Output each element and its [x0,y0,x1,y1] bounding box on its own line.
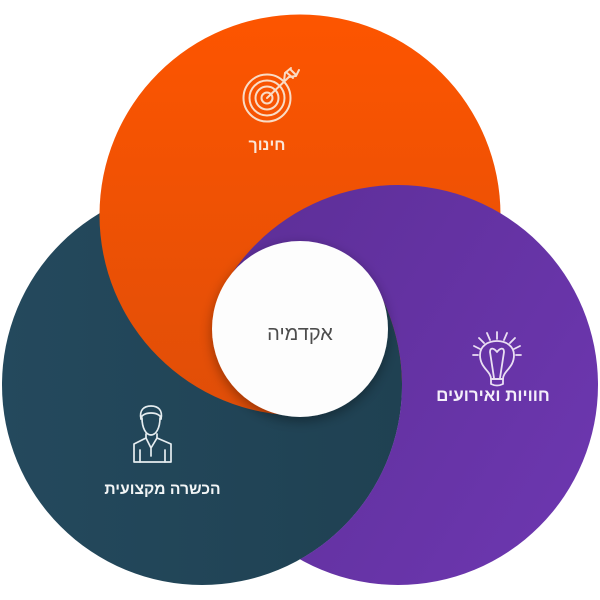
circle: education (orange) [100,14,500,416]
teal overlap over orange, lower right [300,299,402,560]
label: experiences and events: חוויות ואירועים [436,386,550,405]
center circle: academy [212,241,388,417]
center label: אקדמיה [267,323,333,345]
label: professional training: הכשרה מקצועית [104,481,221,498]
icon: light bulb [473,332,521,386]
circle: experiences and events (purple) [198,185,598,585]
circle: professional training (teal) [2,185,402,585]
icon: target with arrow [244,68,299,122]
icon: person with lanyard [134,406,171,462]
label: education: חינוך [249,137,285,154]
